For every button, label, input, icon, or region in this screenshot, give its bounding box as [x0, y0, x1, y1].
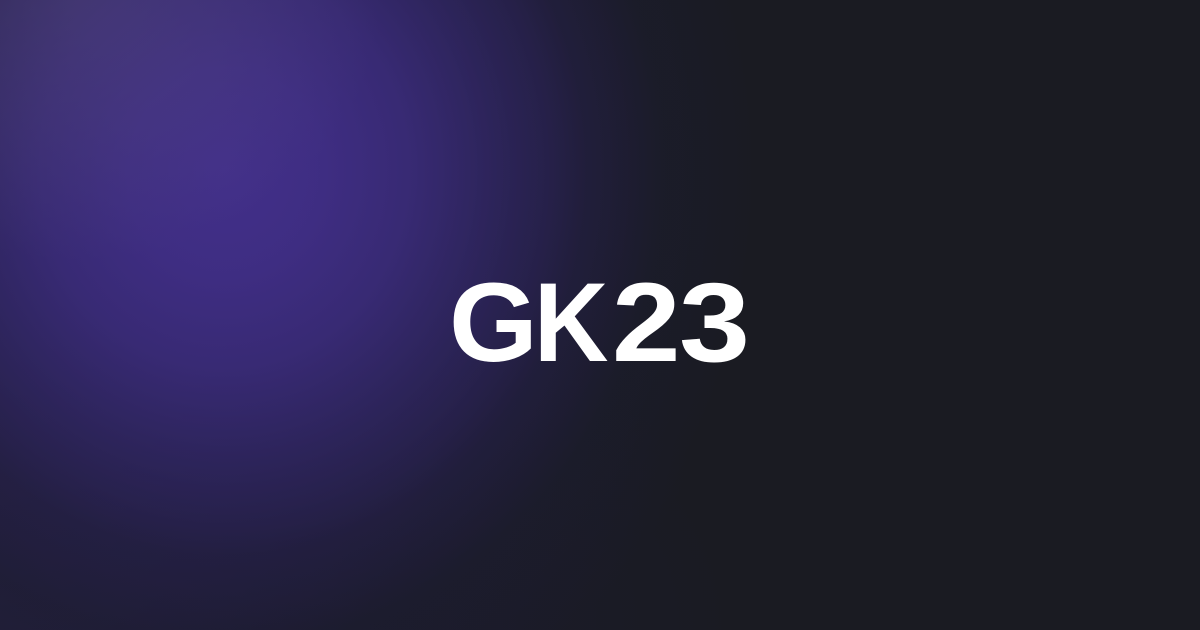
- title: 3: [679, 260, 750, 385]
- title: K: [534, 260, 608, 385]
- title: G: [449, 260, 538, 385]
- title: [449, 260, 750, 385]
- title: 2: [612, 260, 681, 385]
